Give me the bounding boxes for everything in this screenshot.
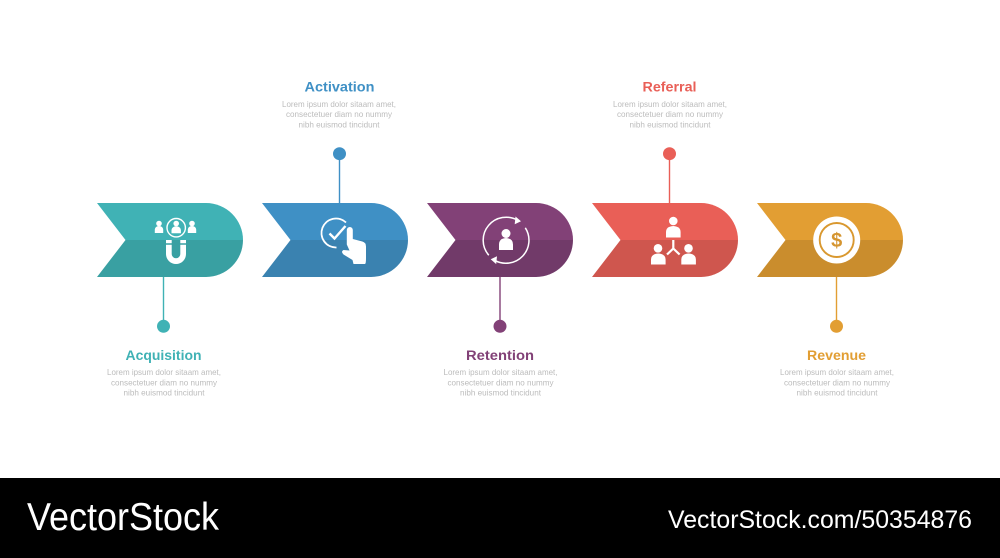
icon: referral network of people xyxy=(651,217,696,264)
label: Acquisition: consectetuer diam no nummy xyxy=(111,378,218,388)
arrow shape: Activation xyxy=(262,203,408,277)
connector and dot: Acquisition xyxy=(157,277,170,333)
icon: person in cycle arrows xyxy=(483,216,529,264)
label: Acquisition: Acquisition xyxy=(126,348,202,363)
label: Referral: consectetuer diam no nummy xyxy=(617,109,724,119)
footer bar xyxy=(0,478,1000,558)
connector and dot: Referral xyxy=(663,147,676,203)
label: Acquisition: nibh euismod tincidunt xyxy=(124,388,205,398)
label: Retention: Lorem ipsum dolor sitaam amet, xyxy=(444,367,558,377)
connector and dot: Retention xyxy=(494,277,506,333)
label: Retention: nibh euismod tincidunt xyxy=(460,388,542,398)
icon: people and magnet xyxy=(155,218,196,264)
step 2: Activation xyxy=(262,80,408,277)
label: Retention: consectetuer diam no nummy xyxy=(448,378,554,388)
icon: check and hand xyxy=(322,219,366,264)
label: Revenue: Revenue xyxy=(807,348,867,363)
label: Referral xyxy=(613,80,727,130)
arrow shape: Revenue xyxy=(757,203,903,277)
label: Activation: consectetuer diam no nummy xyxy=(286,109,393,119)
label: Activation: Activation xyxy=(304,80,374,94)
connector and dot: Activation xyxy=(333,147,346,203)
label: Retention: Retention xyxy=(466,348,534,363)
step 1: Acquisition xyxy=(97,203,243,398)
label: Activation: nibh euismod tincidunt xyxy=(298,120,380,130)
label: Activation xyxy=(282,80,396,130)
arrow shape: Referral xyxy=(592,203,738,277)
label: Revenue: consectetuer diam no nummy xyxy=(784,378,891,388)
icon: dollar coin xyxy=(813,216,860,264)
arrow shape: Retention xyxy=(427,203,573,277)
connector and dot: Revenue xyxy=(830,277,843,333)
label: Acquisition xyxy=(107,348,221,398)
label: Acquisition: Lorem ipsum dolor sitaam amet, xyxy=(107,367,221,377)
label: Revenue xyxy=(780,348,894,398)
label: Retention xyxy=(444,348,558,398)
label: Referral: nibh euismod tincidunt xyxy=(630,120,711,130)
label: Revenue: Lorem ipsum dolor sitaam amet, xyxy=(780,367,894,377)
step 3: Retention xyxy=(427,203,573,398)
footer logo text: VectorStock xyxy=(27,496,219,539)
step 5: Revenue xyxy=(757,203,903,398)
arrow shape: Acquisition xyxy=(97,203,243,277)
icon: dollar coin: $ xyxy=(831,230,842,252)
footer image id: VectorStock.com/50354876 xyxy=(668,506,972,534)
step 4: Referral xyxy=(592,80,738,277)
label: Revenue: nibh euismod tincidunt xyxy=(796,388,878,398)
label: Referral: Referral xyxy=(642,80,696,94)
label: Activation: Lorem ipsum dolor sitaam amet, xyxy=(282,99,396,109)
label: Referral: Lorem ipsum dolor sitaam amet, xyxy=(613,99,727,109)
